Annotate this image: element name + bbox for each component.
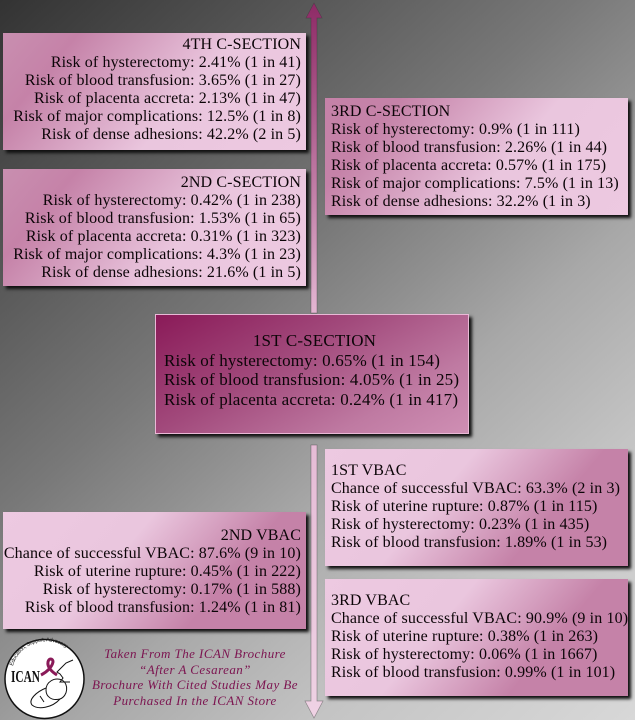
panel: 3rd vbac: Risk of uterine rupture: 0.38% (1 in 263)	[331, 628, 598, 645]
panel: 3rd c-section: Risk of blood transfusion: 2.26% (1 in 44)	[331, 139, 607, 156]
panel: 3rd vbac: Chance of successful VBAC: 90.9% (9 in 10)	[331, 610, 628, 627]
panel: 2nd c-section: Risk of blood transfusion: 1.53% (1 in 65)	[25, 210, 301, 227]
panel: 1st c-section	[155, 314, 469, 434]
text: brochure credit: Brochure With Cited Studies May Be	[92, 677, 298, 692]
panel: 1st vbac: 1ST VBAC	[331, 462, 407, 479]
text: brochure credit: “After A Cesarean”	[139, 662, 251, 677]
panel: 3rd vbac: Risk of blood transfusion: 0.99% (1 in 101)	[331, 664, 615, 681]
panel: 1st vbac	[325, 449, 628, 566]
panel: 1st vbac: Risk of hysterectomy: 0.23% (1 in 435)	[331, 516, 589, 533]
panel: 4th c-section: 4TH C-SECTION	[183, 36, 301, 53]
panel: 2nd vbac: Chance of successful VBAC: 87.6% (9 in 10)	[4, 545, 301, 562]
panel: 2nd c-section: Risk of placenta accreta: 0.31% (1 in 323)	[26, 228, 301, 245]
panel: 2nd vbac: Risk of uterine rupture: 0.45% (1 in 222)	[34, 563, 301, 580]
panel: 1st vbac: Risk of uterine rupture: 0.87% (1 in 115)	[331, 498, 598, 515]
text: 1st c-section risks: Risk of placenta accreta: 0.24% (1 in 417)	[164, 390, 458, 408]
panel: 3rd c-section: Risk of hysterectomy: 0.9% (1 in 111)	[331, 121, 580, 138]
panel: 2nd vbac: Risk of hysterectomy: 0.17% (1 in 588)	[43, 581, 301, 598]
panel: 3rd c-section: 3RD C-SECTION	[331, 103, 450, 120]
icon: ICAN logo	[4, 638, 85, 720]
arrow: up	[306, 2, 322, 314]
arrow: down	[304, 444, 324, 718]
panel: 3rd c-section: Risk of dense adhesions: 32.2% (1 in 3)	[331, 193, 591, 210]
panel: 3rd vbac	[325, 579, 628, 696]
panel: 4th c-section: Risk of placenta accreta: 2.13% (1 in 47)	[34, 90, 301, 107]
panel: 3rd c-section	[325, 98, 628, 215]
panel: 4th c-section: Risk of dense adhesions: 42.2% (2 in 5)	[41, 126, 301, 143]
text: 1st c-section risks: Risk of blood transfusion: 4.05% (1 in 25)	[164, 370, 459, 389]
panel: 1st vbac: Chance of successful VBAC: 63.3% (2 in 3)	[331, 480, 620, 497]
text: 1st c-section risks	[164, 350, 459, 409]
panel: 2nd c-section: Risk of hysterectomy: 0.42% (1 in 238)	[43, 192, 301, 209]
panel: 2nd c-section: 2ND C-SECTION	[181, 174, 301, 191]
icon: ICAN logo: Education, Support, Advocacy	[10, 638, 68, 666]
panel: 2nd vbac: Risk of blood transfusion: 1.24% (1 in 81)	[25, 599, 301, 616]
panel: 4th c-section	[3, 33, 306, 150]
panel: 2nd c-section	[3, 169, 306, 286]
text: brochure credit: Taken From The ICAN Brochure	[104, 646, 286, 661]
panel: 4th c-section: Risk of blood transfusion: 3.65% (1 in 27)	[25, 72, 301, 89]
panel: 2nd vbac	[3, 512, 306, 629]
panel: 2nd c-section: Risk of major complications: 4.3% (1 in 23)	[13, 246, 301, 263]
panel: 4th c-section: Risk of major complications: 12.5% (1 in 8)	[13, 108, 301, 125]
text: brochure credit: Purchased In the ICAN Store	[113, 693, 277, 708]
panel: 3rd c-section: Risk of major complications: 7.5% (1 in 13)	[331, 175, 619, 192]
panel: 4th c-section: Risk of hysterectomy: 2.41% (1 in 41)	[51, 54, 301, 71]
text: 1st c-section risks: Risk of hysterectomy: 0.65% (1 in 154)	[164, 350, 440, 370]
text: brochure credit	[92, 646, 298, 708]
panel: 3rd vbac: 3RD VBAC	[331, 592, 410, 609]
heading: 1st c-section: 1ST C-SECTION	[253, 331, 376, 350]
panel: 3rd c-section: Risk of placenta accreta: 0.57% (1 in 175)	[331, 157, 606, 174]
panel: 2nd vbac: 2ND VBAC	[221, 527, 301, 544]
panel: 2nd c-section: Risk of dense adhesions: 21.6% (1 in 5)	[41, 264, 301, 281]
icon: ICAN logo: ICAN	[11, 667, 40, 686]
panel: 1st vbac: Risk of blood transfusion: 1.89% (1 in 53)	[331, 534, 607, 551]
panel: 3rd vbac: Risk of hysterectomy: 0.06% (1 in 1667)	[331, 646, 597, 663]
